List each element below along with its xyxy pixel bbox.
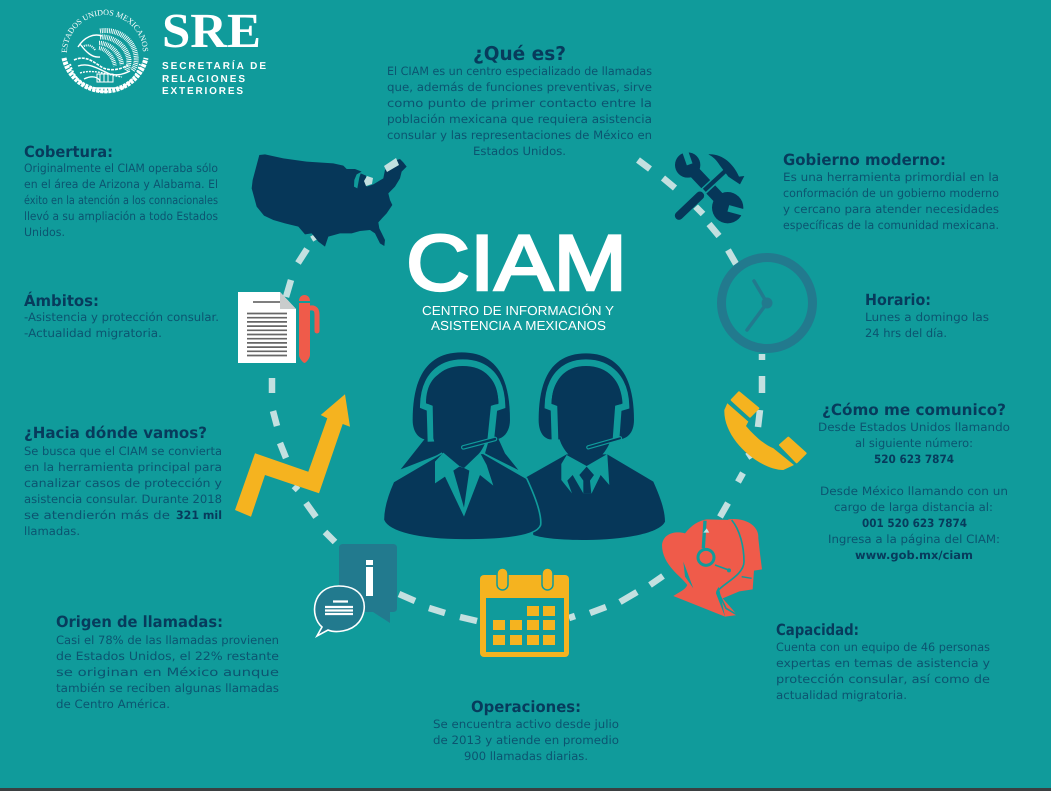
logo: SRE wordmark: EXTERIORES bbox=[162, 86, 243, 97]
icon: rising arrow bbox=[235, 394, 350, 517]
panel: gobierno moderno: específicas de la comunidad mexicana. bbox=[783, 218, 999, 232]
panel: capacidad: expertas en temas de asistencia y bbox=[776, 656, 990, 670]
panel: hacia donde vamos bbox=[24, 424, 222, 538]
panel: como me comunico: www.gob.mx/ciam bbox=[855, 548, 973, 562]
panel: horario: 24 hrs del día. bbox=[865, 326, 947, 340]
panel: que es: ¿Qué es? bbox=[473, 43, 566, 65]
panel: horario: Horario: bbox=[865, 291, 931, 309]
panel: gobierno moderno: Es una herramienta primordial en la bbox=[783, 170, 999, 184]
logo: SRE emblem: ESTADOS UNIDOS MEXICANOS bbox=[62, 10, 148, 53]
panel: que es: población mexicana que requiera asistencia bbox=[387, 112, 652, 126]
panel: operaciones: de 2013 y atiende en promedio bbox=[433, 733, 619, 747]
panel: operaciones: Operaciones: bbox=[471, 698, 581, 716]
dashes over map bbox=[364, 158, 399, 186]
panel: cobertura: en el área de Arizona y Alabama. El bbox=[24, 177, 218, 191]
logo: SRE wordmark: SECRETARÍA DE bbox=[162, 60, 266, 72]
icon: map of United States bbox=[252, 154, 407, 247]
panel: hacia donde vamos: en la herramienta principal para bbox=[24, 460, 222, 474]
panel: como me comunico: 520 623 7874 bbox=[874, 452, 954, 466]
panel: origen de llamadas bbox=[56, 613, 279, 711]
panel: horario bbox=[865, 291, 989, 340]
panel: capacidad: protección consular, así como de bbox=[776, 672, 990, 686]
panel: hacia donde vamos: canalizar casos de protección y bbox=[24, 476, 222, 490]
panel: capacidad: Cuenta con un equipo de 46 personas bbox=[776, 640, 990, 654]
panel: que es: que, además de funciones preventivas, sirve bbox=[387, 80, 652, 94]
panel: ambitos bbox=[24, 291, 219, 340]
logo: SRE emblem bbox=[62, 10, 148, 94]
panel: ambitos: Ámbitos: bbox=[24, 291, 99, 310]
panel: hacia donde vamos: asistencia consular. Durante 2018 bbox=[24, 492, 222, 506]
panel: origen de llamadas: de Estados Unidos, el 22% restante bbox=[56, 649, 279, 663]
title: CIAM: CENTRO DE INFORMACIÓN Y bbox=[422, 303, 614, 318]
panel: operaciones: Se encuentra activo desde julio bbox=[433, 717, 619, 731]
panel: hacia donde vamos: Se busca que el CIAM se convierta bbox=[24, 444, 222, 458]
panel: operaciones: 900 llamadas diarias. bbox=[464, 749, 588, 763]
hammer head bbox=[708, 154, 744, 184]
panel: capacidad bbox=[776, 621, 990, 702]
panel: que es: como punto de primer contacto entre la bbox=[387, 96, 652, 110]
icon: calendar bbox=[480, 568, 569, 657]
icon: information speech bubbles bbox=[315, 544, 397, 636]
panel: capacidad: actualidad migratoria. bbox=[776, 688, 907, 702]
panel: como me comunico: ¿Cómo me comunico? bbox=[822, 401, 1006, 419]
panel: operaciones bbox=[433, 698, 619, 763]
title: CIAM: ASISTENCIA A MEXICANOS bbox=[431, 318, 606, 333]
panel: cobertura: Originalmente el CIAM operaba sólo bbox=[24, 161, 218, 175]
icon: document and pen bbox=[238, 292, 317, 363]
agent: woman bbox=[383, 352, 541, 540]
panel: como me comunico: Ingresa a la página del CIAM: bbox=[828, 532, 1000, 546]
icon: telephone bbox=[724, 392, 806, 470]
panel: ambitos: -Actualidad migratoria. bbox=[24, 326, 162, 340]
dashed circle ring bbox=[272, 160, 762, 621]
panel: gobierno moderno bbox=[783, 151, 999, 232]
panel: como me comunico bbox=[818, 401, 1010, 562]
panel: origen de llamadas: Casi el 78% de las llamadas provienen bbox=[56, 633, 279, 647]
title: CIAM bbox=[406, 218, 627, 333]
panel: origen de llamadas: de Centro América. bbox=[56, 697, 170, 711]
icon: clock bbox=[722, 258, 812, 348]
title: CIAM: CIAM bbox=[406, 218, 627, 307]
panel: horario: Lunes a domingo las bbox=[865, 310, 989, 324]
panel: hacia donde vamos: 321 mil bbox=[176, 508, 222, 522]
panel: que es bbox=[387, 43, 652, 158]
logo: SRE wordmark bbox=[162, 3, 266, 97]
wrench bbox=[675, 151, 747, 223]
panel: como me comunico: cargo de larga distancia al: bbox=[834, 500, 993, 514]
panel: ambitos: -Asistencia y protección consular. bbox=[24, 310, 219, 324]
panel: capacidad: Capacidad: bbox=[776, 621, 859, 639]
icon: red agent heads bbox=[662, 519, 762, 617]
panel: que es: consular y las representaciones de México en bbox=[387, 128, 652, 142]
panel: origen de llamadas: también se reciben algunas llamadas bbox=[56, 681, 279, 695]
panel: gobierno moderno: conformación de un gobierno moderno bbox=[783, 186, 999, 200]
panel: hacia donde vamos: llamadas. bbox=[24, 524, 80, 538]
panel: cobertura bbox=[24, 143, 218, 239]
panel: cobertura: Cobertura: bbox=[24, 143, 113, 161]
panel: cobertura: éxito en la atención a los connacionales bbox=[24, 193, 218, 207]
panel: gobierno moderno: y cercano para atender necesidades bbox=[783, 202, 999, 216]
panel: hacia donde vamos: se atendierón más de bbox=[24, 508, 170, 522]
logo: SRE wordmark: RELACIONES bbox=[162, 74, 245, 85]
panel: como me comunico: Desde Estados Unidos llamando bbox=[818, 420, 1010, 434]
panel: como me comunico: al siguiente número: bbox=[855, 436, 973, 450]
panel: origen de llamadas: Origen de llamadas: bbox=[56, 613, 223, 631]
panel: hacia donde vamos: ¿Hacia dónde vamos? bbox=[24, 424, 207, 442]
panel: origen de llamadas: se originan en México aunque bbox=[56, 665, 279, 679]
panel: como me comunico: Desde México llamando con un bbox=[820, 484, 1008, 498]
panel: que es: Estados Unidos. bbox=[473, 144, 566, 158]
icon: two call-centre agents bbox=[383, 352, 665, 540]
panel: que es: El CIAM es un centro especializado de llamadas bbox=[387, 64, 652, 78]
panel: como me comunico: 001 520 623 7874 bbox=[862, 516, 967, 530]
panel: gobierno moderno: Gobierno moderno: bbox=[783, 151, 946, 169]
panel: cobertura: llevó a su ampliación a todo Estados bbox=[24, 209, 218, 223]
agent: man bbox=[526, 353, 665, 540]
panel: cobertura: Unidos. bbox=[24, 225, 65, 239]
logo: SRE wordmark: SRE bbox=[162, 3, 261, 58]
icon: tools bbox=[675, 151, 747, 223]
